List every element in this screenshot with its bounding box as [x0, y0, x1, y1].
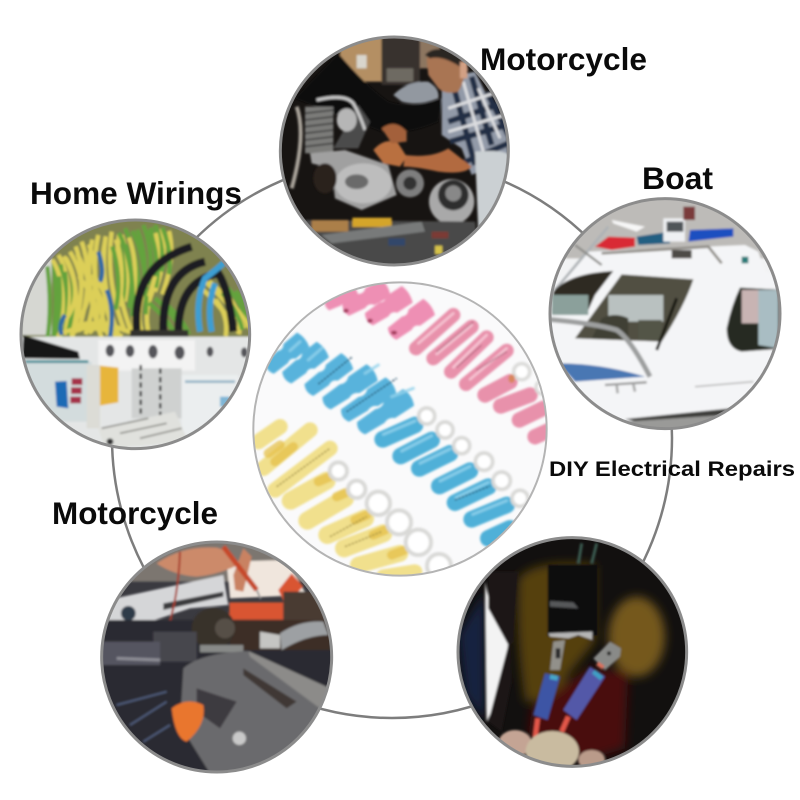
engine bay [100, 620, 340, 773]
panel: top motorcycle mechanic photo [280, 35, 512, 268]
side window [552, 271, 613, 312]
heading: Boat label: Boat [642, 160, 714, 196]
man [442, 72, 508, 175]
seat and tank [295, 53, 442, 132]
breaker panel [22, 334, 248, 406]
red covers [229, 602, 283, 620]
front window [575, 274, 693, 342]
heading: DIY Electrical Repairs label: DIY Electrical Repairs [549, 458, 795, 481]
heading: top Motorcycle label: Motorcycle [480, 41, 647, 77]
hand and probes [157, 547, 238, 577]
orange cap [172, 702, 204, 742]
heading: lower Motorcycle label: Motorcycle [52, 495, 218, 531]
engine [305, 107, 333, 153]
blue connectors [262, 331, 528, 538]
workshop background [340, 35, 382, 82]
heading: Home Wirings label: Home Wirings [30, 175, 242, 211]
rear window [727, 288, 785, 352]
terminals [550, 640, 565, 670]
black connector [548, 564, 598, 636]
panel: bottom-right wire repair photo [458, 538, 687, 772]
yellow connectors [258, 427, 451, 578]
blue heat shrink [533, 673, 560, 720]
panel: central terminal connectors photo [253, 279, 550, 578]
panel: left home wiring photo [15, 215, 256, 450]
connecting ring [112, 158, 672, 718]
background with battery [131, 544, 302, 583]
valve cover [180, 651, 330, 773]
boat body [552, 244, 774, 421]
railing [545, 319, 650, 377]
panel: bottom-left engine photo [100, 538, 340, 773]
sky and wall [566, 200, 764, 260]
hull details [558, 363, 645, 382]
panel: right boat photo [545, 195, 785, 435]
rear wheel [429, 179, 474, 224]
fingers [498, 730, 532, 757]
blurred yellow background [458, 563, 665, 762]
wire bundle [22, 222, 248, 338]
roof lights [595, 237, 635, 250]
floor [306, 219, 477, 264]
pink connectors [322, 279, 550, 437]
